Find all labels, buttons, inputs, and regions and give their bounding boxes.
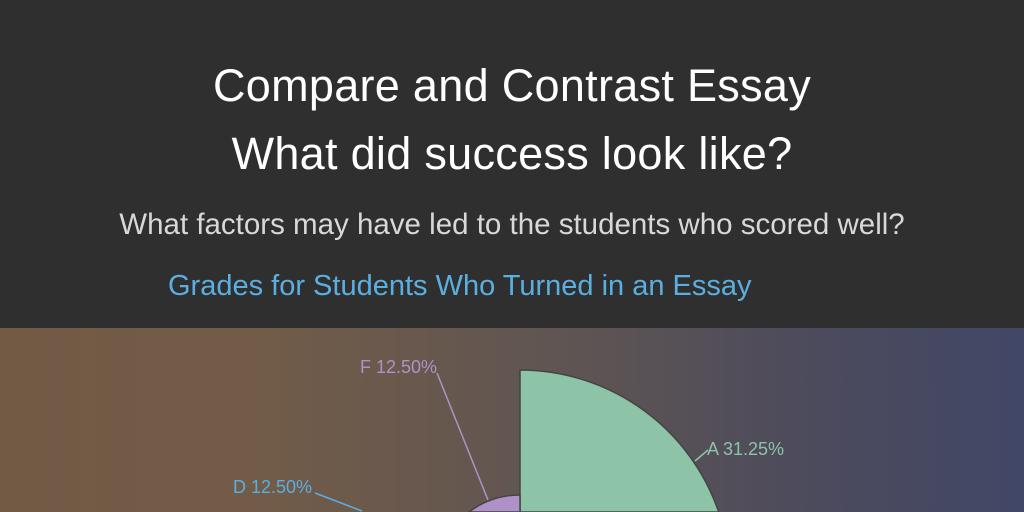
pie slice A [520,370,719,512]
label D [233,477,362,511]
title line 1: Compare and Contrast Essay [213,60,811,111]
label A: A 31.25% [707,439,784,459]
label F: F 12.50% [360,357,437,377]
chart heading: Grades for Students Who Turned in an Essay [168,270,752,302]
subtitle: What factors may have led to the students who scored well? [119,208,905,241]
chart panel [0,328,1024,512]
header panel [0,0,1024,328]
pie slice F [469,495,520,512]
label F [360,357,488,500]
label D: D 12.50% [233,477,312,497]
title line 2: What did success look like? [232,128,792,179]
